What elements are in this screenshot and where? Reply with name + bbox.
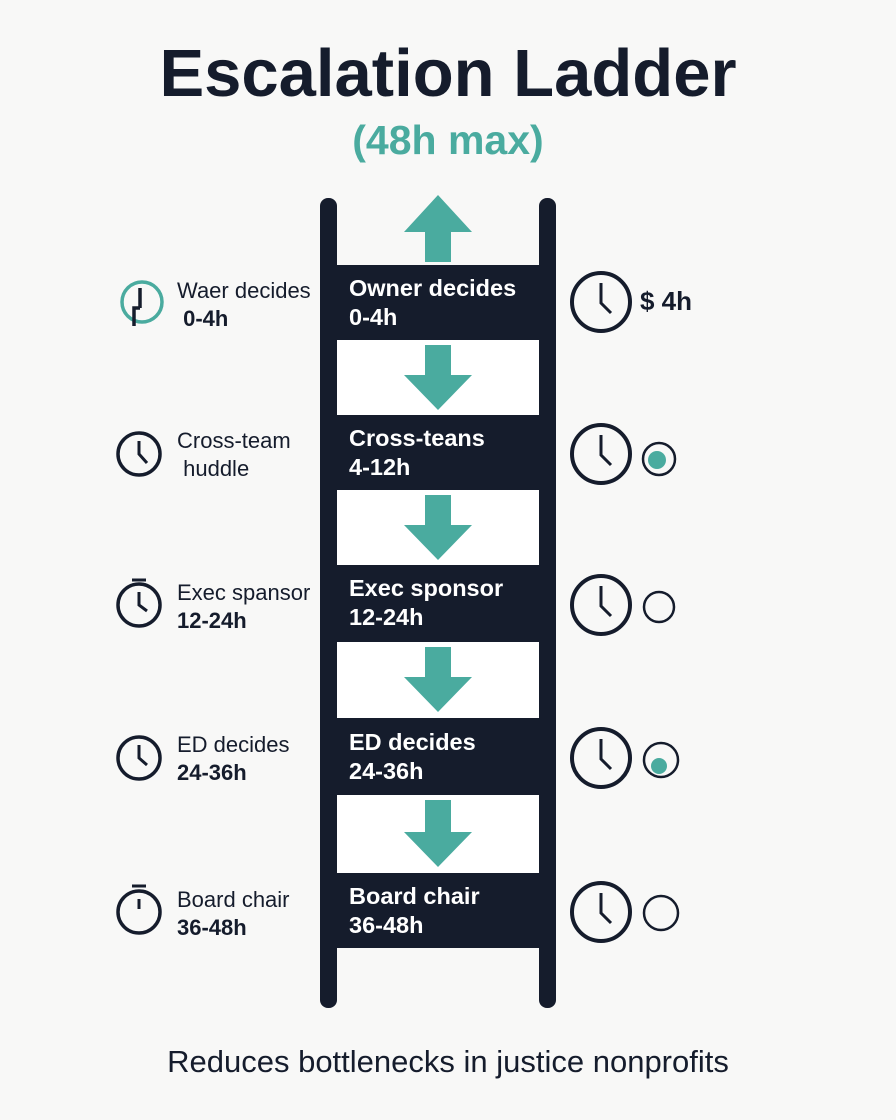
title: Escalation Ladder [159,36,737,111]
footer: Reduces bottlenecks in justice nonprofits [167,1044,729,1079]
rung 3 text [349,575,503,630]
left label 2 [177,428,291,481]
rung 5 text: 36-48h [349,912,423,938]
left label 4: ED decides [177,732,290,757]
left label 2: huddle [183,456,249,481]
rung 4 text: ED decides [349,729,476,755]
rung 1 text [349,275,516,330]
left label 3: 12-24h [177,608,247,633]
rung 1 text: 0-4h [349,304,397,330]
rung 5 text [349,883,480,938]
left label 3: Exec spansor [177,580,310,605]
left label 5: 36-48h [177,915,247,940]
left label 5: Board chair [177,887,290,912]
left label 1: 0-4h [183,306,228,331]
left label 1: Waer decides [177,278,311,303]
right icons [572,273,678,941]
left label 2: Cross-team [177,428,291,453]
rung 2 text [349,425,485,480]
left label 5 [177,887,290,940]
rung 3 text: 12-24h [349,604,423,630]
right label: $ 4h [640,286,692,316]
rung 4 text [349,729,476,784]
rung 4 text: 24-36h [349,758,423,784]
rung 2 text: Cross-teans [349,425,485,451]
rung 2 text: 4-12h [349,454,410,480]
rung 5 text: Board chair [349,883,480,909]
left label 1 [177,278,311,331]
left label 4: 24-36h [177,760,247,785]
rung 3 text: Exec sponsor [349,575,503,601]
left label 4 [177,732,290,785]
rung 1 text: Owner decides [349,275,516,301]
subtitle: (48h max) [352,117,544,163]
left label 3 [177,580,310,633]
left icons [118,282,162,933]
